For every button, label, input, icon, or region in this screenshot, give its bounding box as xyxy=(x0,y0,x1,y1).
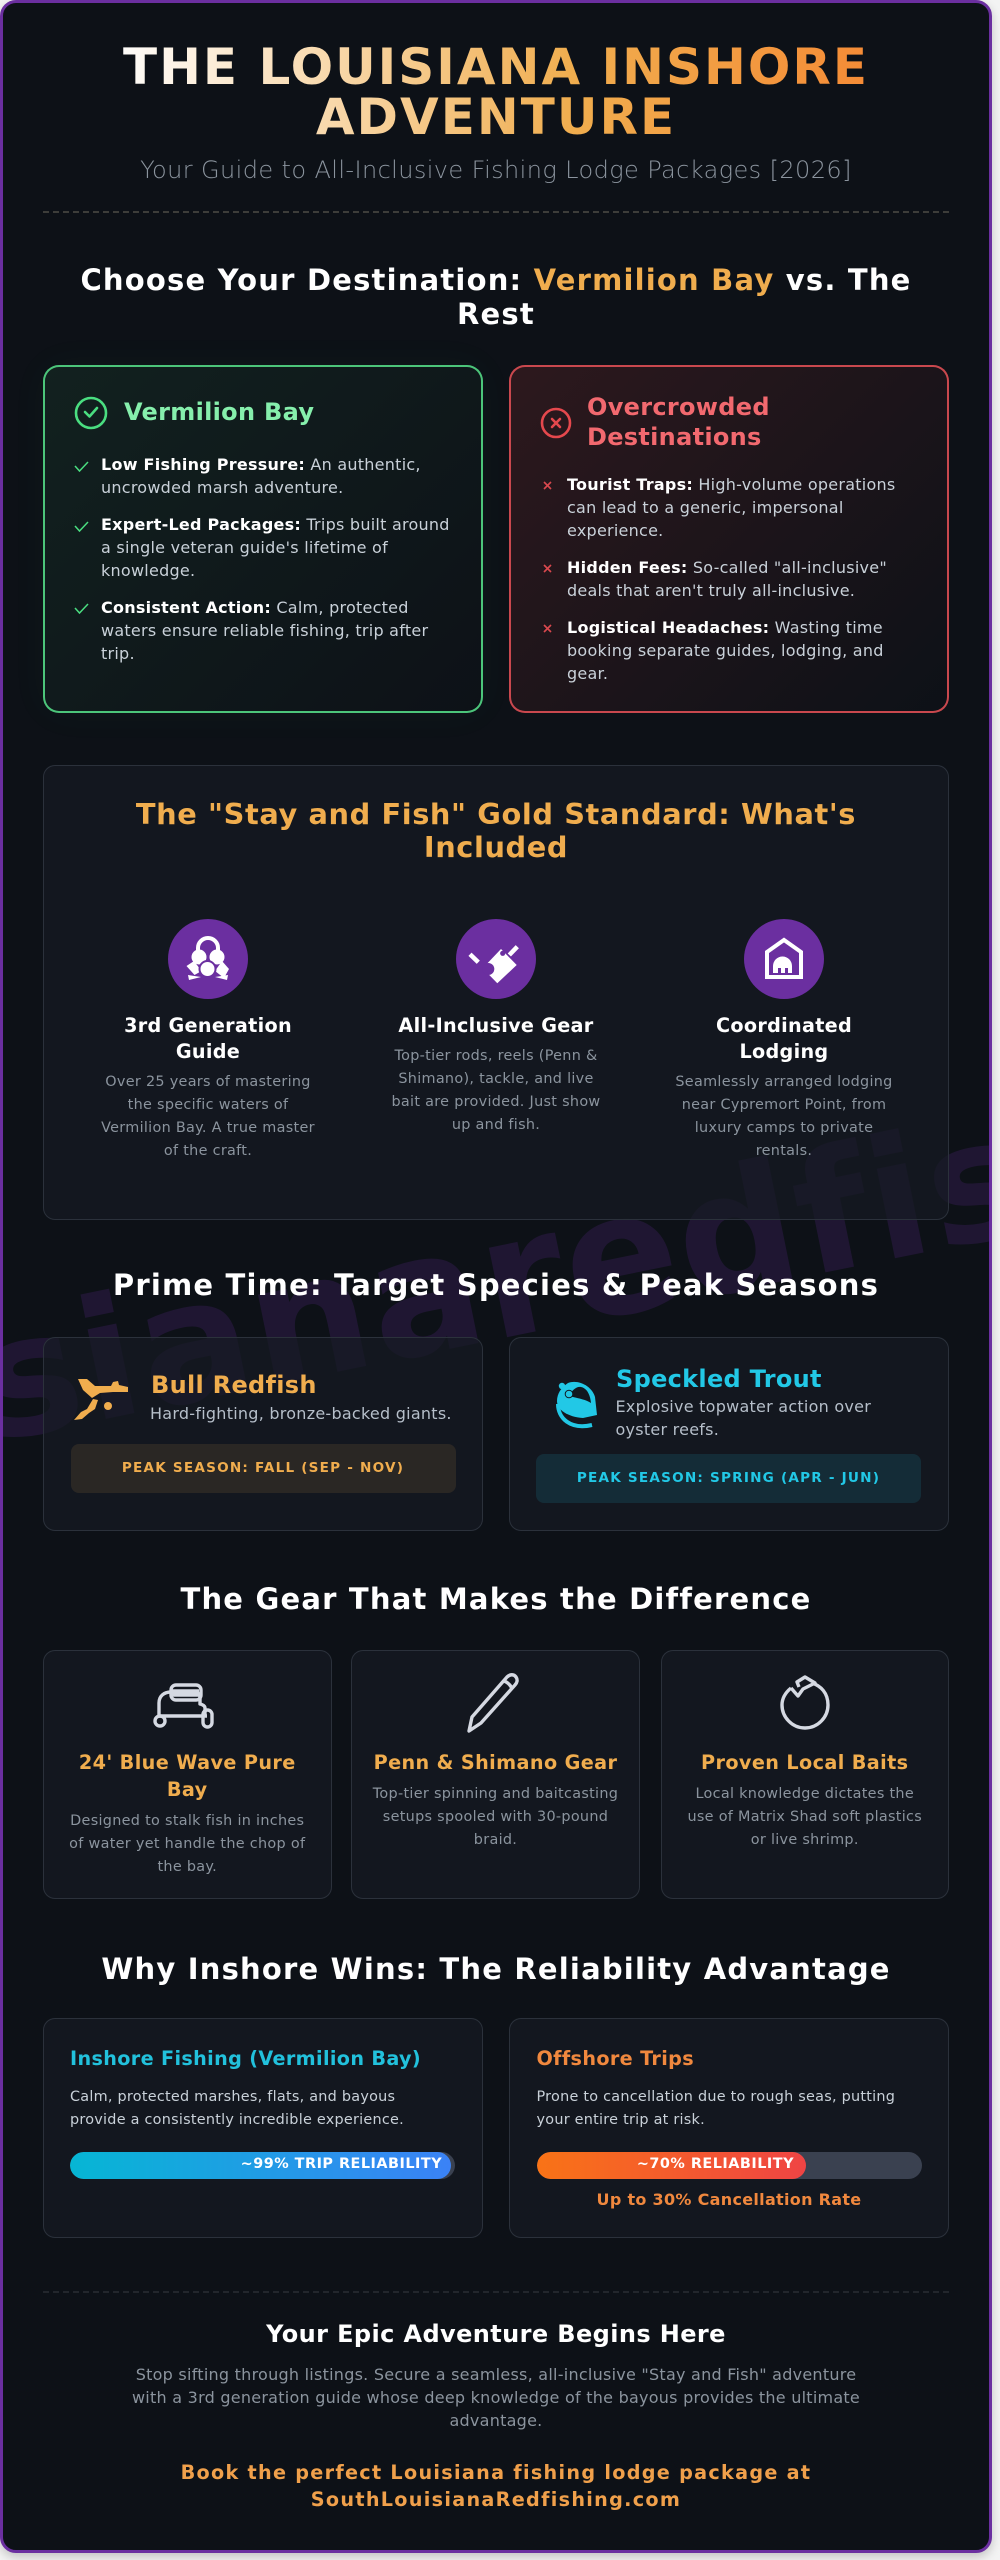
icon: check circle xyxy=(74,396,108,430)
panel description: your entire trip at risk. xyxy=(536,2112,705,2128)
heading: choose your destination: Rest xyxy=(457,297,535,331)
reliability bar 70%: ~70% RELIABILITY xyxy=(637,2156,794,2172)
list item: deals that aren't truly all-inclusive. xyxy=(567,581,855,600)
heading: gear: The Gear That Makes the Difference xyxy=(180,1582,812,1616)
gear description: Top-tier spinning and baitcasting xyxy=(373,1786,618,1802)
feature title: 3rd Generation xyxy=(124,1014,292,1036)
species description xyxy=(616,1396,871,1438)
list item: Hidden Fees: So-called "all-inclusive" xyxy=(567,558,887,577)
icon: check xyxy=(74,604,88,614)
heading: Vermilion Bay xyxy=(124,398,314,426)
peak season badge: PEAK SEASON: FALL (SEP - NOV) xyxy=(122,1460,404,1476)
feature description: Vermilion Bay. A true master xyxy=(101,1120,315,1136)
feature description: the specific waters of xyxy=(128,1096,288,1112)
list item: can lead to a generic, impersonal xyxy=(567,498,844,517)
reliability bar 99% xyxy=(70,2152,455,2179)
species name: Speckled Trout xyxy=(616,1364,822,1392)
footer text: with a 3rd generation guide whose deep knowledge of the bayous provides the ultimate xyxy=(132,2388,860,2407)
icon: x xyxy=(544,481,552,490)
species description: Explosive topwater action over xyxy=(616,1396,871,1416)
icon: lodging xyxy=(744,919,824,999)
feature description: up and fish. xyxy=(452,1116,540,1132)
gear description: Designed to stalk fish in inches xyxy=(70,1812,304,1828)
heading: choose your destination: Choose Your Destination: Vermilion Bay vs. The xyxy=(80,263,912,297)
heading: choose your destination xyxy=(80,263,912,331)
species description: oyster reefs. xyxy=(616,1420,719,1438)
gear description: the bay. xyxy=(157,1858,217,1874)
peak season badge xyxy=(536,1454,921,1503)
feature description: bait are provided. Just show xyxy=(391,1094,600,1110)
gear description xyxy=(687,1786,922,1848)
list item xyxy=(567,558,887,600)
gear description xyxy=(69,1812,306,1874)
heading: The "Stay and Fish" Gold Standard: What's xyxy=(136,796,856,830)
panel title: Offshore Trips xyxy=(536,2047,694,2070)
gear title: 24' Blue Wave Pure xyxy=(79,1751,296,1774)
call to action: Book the perfect Louisiana fishing lodge package at xyxy=(181,2461,811,2484)
panel: Stay and Fish gold standard xyxy=(43,765,949,1220)
panel: offshore xyxy=(509,2018,949,2238)
panel description: provide a consistently incredible experience. xyxy=(70,2112,404,2128)
feature title xyxy=(124,1014,292,1062)
footer text xyxy=(132,2365,860,2430)
list item: Expert-Led Packages: Trips built around xyxy=(101,515,450,534)
icon: boat xyxy=(153,1683,214,1729)
gear description: or live shrimp. xyxy=(751,1832,859,1848)
gear description: braid. xyxy=(474,1832,517,1848)
icon: check xyxy=(74,522,88,532)
gear title: Penn & Shimano Gear xyxy=(374,1751,617,1774)
heading: Included xyxy=(424,830,568,864)
icon: trout xyxy=(556,1382,597,1428)
title: ADVENTURE xyxy=(316,88,676,146)
reliability bar 70% xyxy=(536,2152,922,2179)
gear description: of water yet handle the chop of xyxy=(69,1836,305,1852)
footer text: advantage. xyxy=(449,2411,543,2430)
feature title: Lodging xyxy=(740,1040,828,1062)
panel: rods xyxy=(351,1650,640,1899)
gear description: use of Matrix Shad soft plastics xyxy=(687,1808,922,1824)
heading xyxy=(136,796,856,864)
feature description xyxy=(391,1048,600,1132)
list item: Tourist Traps: High-volume operations xyxy=(567,475,895,494)
feature title: Guide xyxy=(176,1040,240,1062)
feature description xyxy=(101,1074,315,1158)
feature description: of the craft. xyxy=(164,1142,252,1158)
feature description: Shimano), tackle, and live xyxy=(398,1070,594,1086)
heading: Overcrowded xyxy=(587,393,770,421)
gear description: setups spooled with 30-pound xyxy=(383,1808,608,1824)
feature description: near Cypremort Point, from xyxy=(682,1096,886,1112)
icon: pencil rod xyxy=(467,1673,519,1733)
heading: prime time: Prime Time: Target Species & Peak Seasons xyxy=(113,1268,879,1302)
list item: knowledge. xyxy=(101,561,195,580)
panel: Speckled Trout xyxy=(509,1337,949,1531)
gear title xyxy=(79,1751,296,1800)
feature description: Seamlessly arranged lodging xyxy=(675,1074,893,1090)
gear title: Proven Local Baits xyxy=(701,1751,908,1774)
list item: gear. xyxy=(567,664,608,683)
panel: Bull Redfish xyxy=(43,1337,482,1531)
icon: x xyxy=(544,564,552,573)
feature title: Coordinated xyxy=(716,1014,852,1036)
heading: Destinations xyxy=(587,423,762,451)
list item: a single veteran guide's lifetime of xyxy=(101,538,388,557)
panel: boat xyxy=(43,1650,332,1899)
gear description: Local knowledge dictates the xyxy=(695,1786,914,1802)
feature description xyxy=(675,1074,893,1158)
list item: booking separate guides, lodging, and xyxy=(567,641,884,660)
icon: check xyxy=(74,462,88,472)
feature title xyxy=(716,1014,852,1062)
species description: Hard-fighting, bronze-backed giants. xyxy=(150,1404,452,1422)
list item: Consistent Action: Calm, protected xyxy=(101,598,409,617)
footer heading: Your Epic Adventure Begins Here xyxy=(266,2320,726,2348)
icon: x circle xyxy=(540,408,572,438)
species name: Bull Redfish xyxy=(151,1370,317,1398)
panel: Vermilion Bay xyxy=(43,365,482,713)
list item xyxy=(101,455,421,497)
icon: gear xyxy=(456,919,536,999)
icon: x xyxy=(544,624,552,633)
feature description: Top-tier rods, reels (Penn & xyxy=(394,1048,598,1064)
cancellation note: Up to 30% Cancellation Rate xyxy=(597,2190,861,2208)
call to action: SouthLouisianaRedfishing.com xyxy=(311,2488,681,2511)
peak season badge: PEAK SEASON: SPRING (APR - JUN) xyxy=(577,1470,880,1486)
panel description xyxy=(536,2088,895,2128)
subtitle: Your Guide to All-Inclusive Fishing Lodge Packages [2026] xyxy=(140,156,852,184)
heading xyxy=(587,393,770,451)
icon: bait xyxy=(780,1675,830,1730)
feature description: luxury camps to private xyxy=(695,1120,873,1136)
panel: Overcrowded Destinations xyxy=(509,365,949,713)
panel description xyxy=(70,2088,404,2128)
call to action xyxy=(181,2461,811,2511)
list item xyxy=(567,618,884,683)
title: THE LOUISIANA INSHORE xyxy=(123,38,869,96)
feature title: All-Inclusive Gear xyxy=(398,1014,594,1036)
feature description: rentals. xyxy=(756,1142,812,1158)
list item: uncrowded marsh adventure. xyxy=(101,478,343,497)
panel description: Calm, protected marshes, flats, and bayous xyxy=(70,2088,395,2104)
list item: Low Fishing Pressure: An authentic, xyxy=(101,455,421,474)
list item: experience. xyxy=(567,521,664,540)
gear title: Bay xyxy=(167,1778,208,1800)
reliability bar 99%: ~99% TRIP RELIABILITY xyxy=(241,2156,442,2172)
list item: trip. xyxy=(101,644,135,663)
list item: waters ensure reliable fishing, trip after xyxy=(101,621,428,640)
panel title: Inshore Fishing (Vermilion Bay) xyxy=(70,2047,421,2070)
title xyxy=(110,42,882,142)
list item xyxy=(101,598,428,663)
panel description: Prone to cancellation due to rough seas, putting xyxy=(536,2088,895,2104)
feature description: Over 25 years of mastering xyxy=(105,1074,311,1090)
gear description xyxy=(372,1786,618,1848)
panel: baits xyxy=(660,1650,949,1899)
footer text: Stop sifting through listings. Secure a seamless, all-inclusive "Stay and Fish" adventure xyxy=(136,2365,856,2384)
icon: guide xyxy=(168,919,248,999)
list item xyxy=(101,515,450,580)
panel: inshore xyxy=(43,2018,482,2238)
list item: Logistical Headaches: Wasting time xyxy=(567,618,883,637)
list item xyxy=(567,475,895,540)
peak season badge xyxy=(70,1444,456,1493)
heading: why inshore wins: Why Inshore Wins: The Reliability Advantage xyxy=(101,1952,891,1986)
icon: redfish xyxy=(74,1379,128,1420)
